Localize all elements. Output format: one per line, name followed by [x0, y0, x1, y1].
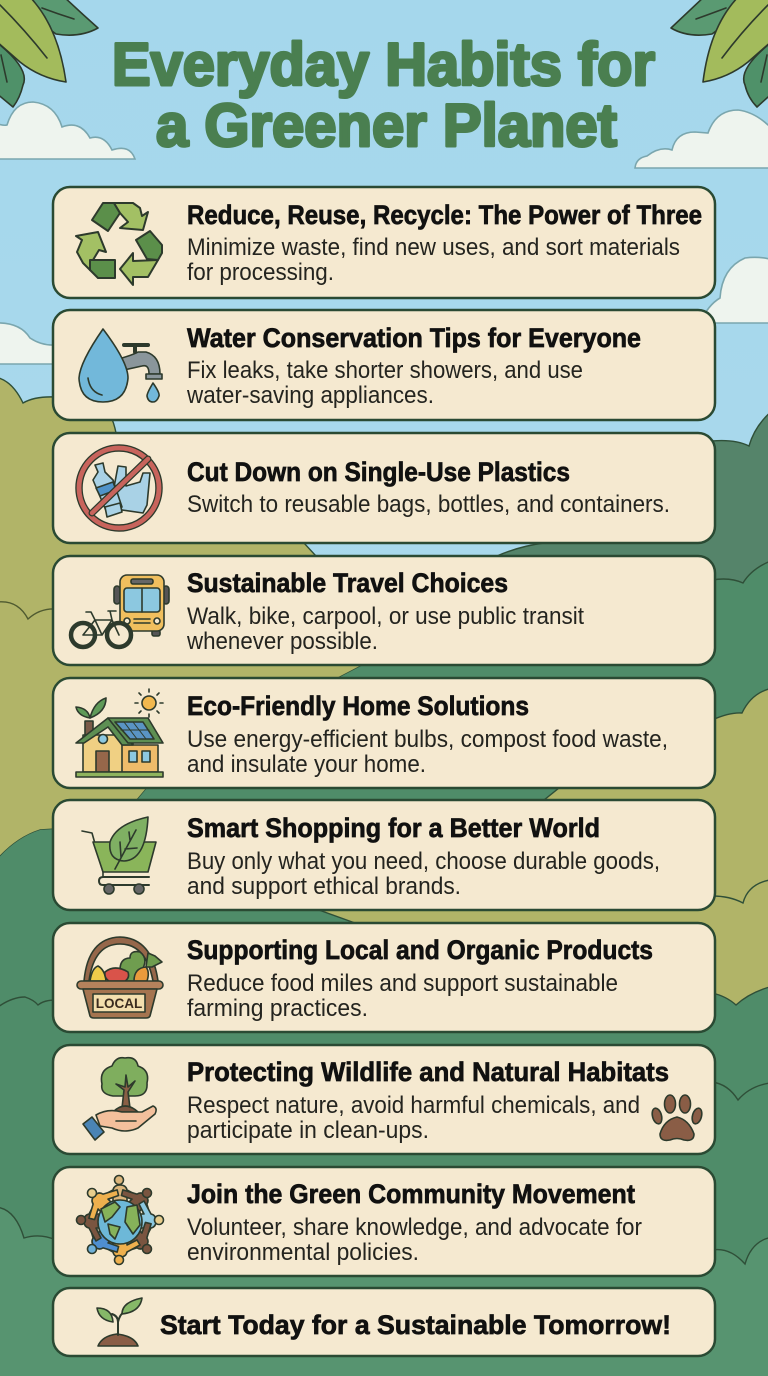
icon: paw print: [651, 1095, 703, 1140]
title: Everyday Habits for: [112, 31, 655, 98]
description: Reduce food miles and support sustainable: [187, 970, 618, 997]
description: participate in clean-ups.: [187, 1117, 429, 1144]
heading: Eco-Friendly Home Solutions: [187, 691, 529, 721]
panel: single-use plastics: [53, 433, 715, 543]
description: farming practices.: [187, 995, 368, 1022]
icon: water drop and faucet: [79, 329, 162, 402]
heading: Protecting Wildlife and Natural Habitats: [187, 1057, 669, 1087]
cloud: left middle: [0, 323, 56, 364]
heading: Sustainable Travel Choices: [187, 568, 508, 598]
description: Switch to reusable bags, bottles, and containers.: [187, 491, 670, 518]
icon: local produce basket: [77, 937, 163, 1018]
icon: sprout: [97, 1298, 142, 1346]
description: [187, 1214, 642, 1266]
icon: hand holding tree: [83, 1058, 156, 1140]
panel: call to action: [53, 1288, 715, 1356]
description: [187, 726, 668, 778]
panel: green community: [53, 1167, 715, 1276]
description: water-saving appliances.: [186, 382, 434, 409]
title: [112, 31, 655, 159]
hill: front lower green: [0, 1207, 768, 1376]
panel: eco-friendly home: [53, 678, 715, 788]
panel: local and organic: [53, 923, 715, 1032]
leaves: top right: [671, 0, 768, 107]
heading: Supporting Local and Organic Products: [187, 935, 653, 965]
icon: recycle arrows: [76, 203, 162, 285]
description: Volunteer, share knowledge, and advocate for: [187, 1214, 642, 1241]
panel: protecting wildlife: [53, 1045, 715, 1154]
icon: bus and bicycle: [71, 575, 169, 647]
description: and insulate your home.: [187, 751, 426, 778]
hill: left olive: [0, 377, 372, 905]
icon: people around globe: [76, 1176, 164, 1264]
heading: Water Conservation Tips for Everyone: [187, 323, 641, 353]
description: and support ethical brands.: [187, 873, 461, 900]
description: Fix leaks, take shorter showers, and use: [187, 357, 583, 384]
description: [187, 970, 618, 1022]
icon: local produce basket: LOCAL: [96, 996, 142, 1011]
panel: reduce reuse recycle: [53, 187, 715, 298]
icon: house with solar panel: [76, 689, 163, 777]
description: Respect nature, avoid harmful chemicals, and: [187, 1092, 640, 1119]
hill: middle green: [0, 560, 768, 1376]
description: Minimize waste, find new uses, and sort materials: [187, 234, 680, 261]
hill: right olive: [319, 688, 768, 1005]
description: Use energy-efficient bulbs, compost food waste,: [187, 726, 668, 753]
description: [187, 1092, 640, 1144]
description: for processing.: [187, 259, 334, 286]
panel: water conservation: [53, 310, 715, 420]
description: [187, 848, 660, 900]
heading: Reduce, Reuse, Recycle: The Power of Three: [187, 200, 702, 230]
description: [186, 357, 583, 409]
hill outlines: [0, 602, 768, 1100]
description: environmental policies.: [187, 1239, 419, 1266]
panel: smart shopping: [53, 800, 715, 910]
description: [187, 234, 680, 286]
icon: no plastics: [79, 448, 159, 528]
cloud: top right: [635, 110, 768, 168]
description: whenever possible.: [186, 628, 378, 655]
hill: main green back: [0, 410, 768, 1376]
closing message: Start Today for a Sustainable Tomorrow!: [160, 1310, 671, 1340]
heading: Smart Shopping for a Better World: [187, 813, 600, 843]
description: [186, 603, 584, 655]
description: Buy only what you need, choose durable goods,: [187, 848, 660, 875]
description: Walk, bike, carpool, or use public transit: [187, 603, 584, 630]
title: a Greener Planet: [156, 92, 617, 159]
hill outline: right middle: [712, 560, 768, 583]
icon: shopping cart with leaf: [82, 817, 156, 894]
panel: sustainable travel: [53, 556, 715, 665]
cloud: right middle: [700, 257, 768, 323]
heading: Cut Down on Single-Use Plastics: [187, 457, 570, 487]
leaves: top left: [0, 0, 98, 107]
heading: Join the Green Community Movement: [187, 1179, 635, 1209]
cloud: top left: [0, 102, 135, 159]
